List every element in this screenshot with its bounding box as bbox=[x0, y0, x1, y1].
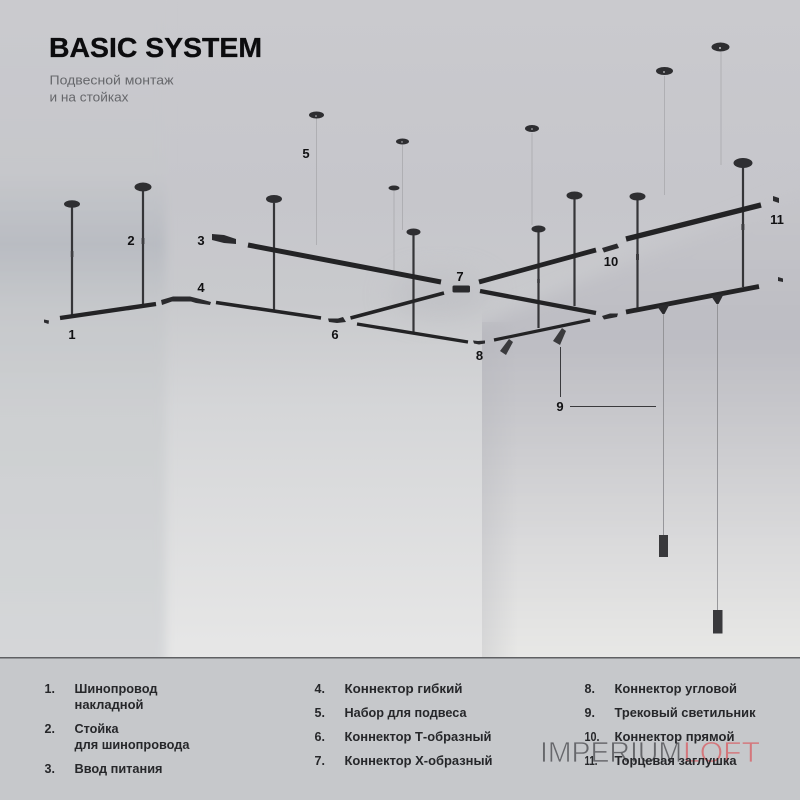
legend column 2: Коннектор Х-образный bbox=[344, 754, 492, 768]
ceiling suspension sets (thin wires and discs) bbox=[309, 42, 730, 272]
legend column 2: 5. bbox=[314, 706, 325, 720]
legend column 2: Коннектор гибкий bbox=[344, 682, 462, 696]
legend column 2: Набор для подвеса bbox=[344, 706, 468, 720]
subtitle: и на стойках bbox=[50, 90, 129, 104]
legend column 3 bbox=[584, 682, 756, 768]
legend column 1 bbox=[44, 682, 191, 776]
legend column 1: Стойка bbox=[74, 722, 120, 736]
diagram numbers: 3 bbox=[197, 233, 205, 248]
diagram numbers: 11 bbox=[770, 212, 784, 227]
watermark logo bbox=[540, 737, 760, 769]
legend column 1: 2. bbox=[44, 722, 55, 736]
legend column 2: 4. bbox=[314, 682, 325, 696]
legend column 3: Трековый светильник bbox=[614, 706, 756, 720]
legend column 1: для шинопровода bbox=[74, 738, 191, 752]
legend panel top rule bbox=[0, 657, 800, 658]
track spotlights bbox=[500, 328, 566, 355]
room background bbox=[0, 204, 800, 657]
legend column 3: 9. bbox=[584, 706, 595, 720]
pendant lights bbox=[657, 294, 724, 634]
legend column 3: Коннектор угловой bbox=[614, 682, 737, 696]
legend column 2 bbox=[314, 682, 492, 768]
component 8: corner connector bbox=[473, 340, 485, 344]
diagram numbers: 6 bbox=[331, 327, 339, 342]
legend column 3: 10. bbox=[584, 730, 600, 744]
diagram numbers: 7 bbox=[456, 269, 464, 284]
legend panel background bbox=[0, 657, 800, 800]
legend column 1: Шинопровод bbox=[74, 682, 158, 696]
diagram numbers: 9 bbox=[556, 399, 564, 414]
subtitle: Подвесной монтаж bbox=[50, 74, 174, 88]
legend column 2: 6. bbox=[314, 730, 325, 744]
component 6: T connector bbox=[328, 317, 346, 323]
title: BASIC SYSTEM bbox=[49, 32, 262, 63]
legend column 1: 3. bbox=[44, 762, 55, 776]
component 11: end caps and left end cap bbox=[44, 196, 783, 324]
diagram numbers: 10 bbox=[604, 254, 618, 269]
legend column 1: 1. bbox=[44, 682, 55, 696]
diagram numbers: 2 bbox=[127, 233, 135, 248]
watermark logo: IMPERIUM bbox=[540, 737, 682, 769]
diagram numbers bbox=[68, 146, 784, 414]
diagram numbers: 1 bbox=[68, 327, 76, 342]
legend column 2: 7. bbox=[314, 754, 325, 768]
legend column 1: накладной bbox=[74, 698, 144, 712]
diagram numbers: 5 bbox=[302, 146, 310, 161]
diagram numbers: 4 bbox=[197, 280, 205, 295]
support posts bbox=[64, 158, 752, 332]
watermark logo: LOFT bbox=[683, 737, 760, 769]
legend column 3: 11. bbox=[584, 754, 598, 768]
leader lines for item 9 bbox=[560, 347, 656, 406]
component 4: flexible connector bbox=[161, 296, 211, 305]
legend column 3: 8. bbox=[584, 682, 595, 696]
component 7: X connector bbox=[452, 286, 470, 292]
component 3: power input bbox=[212, 234, 236, 244]
component 10: straight connectors bbox=[602, 244, 619, 320]
legend column 3: Коннектор прямой bbox=[614, 730, 734, 744]
legend column 2: Коннектор Т-образный bbox=[344, 730, 492, 744]
legend column 1: Ввод питания bbox=[74, 762, 162, 776]
subtitle bbox=[50, 74, 174, 104]
track rails bbox=[60, 205, 761, 342]
diagram numbers: 8 bbox=[476, 348, 483, 363]
legend column 3: Торцевая заглушка bbox=[614, 754, 738, 768]
